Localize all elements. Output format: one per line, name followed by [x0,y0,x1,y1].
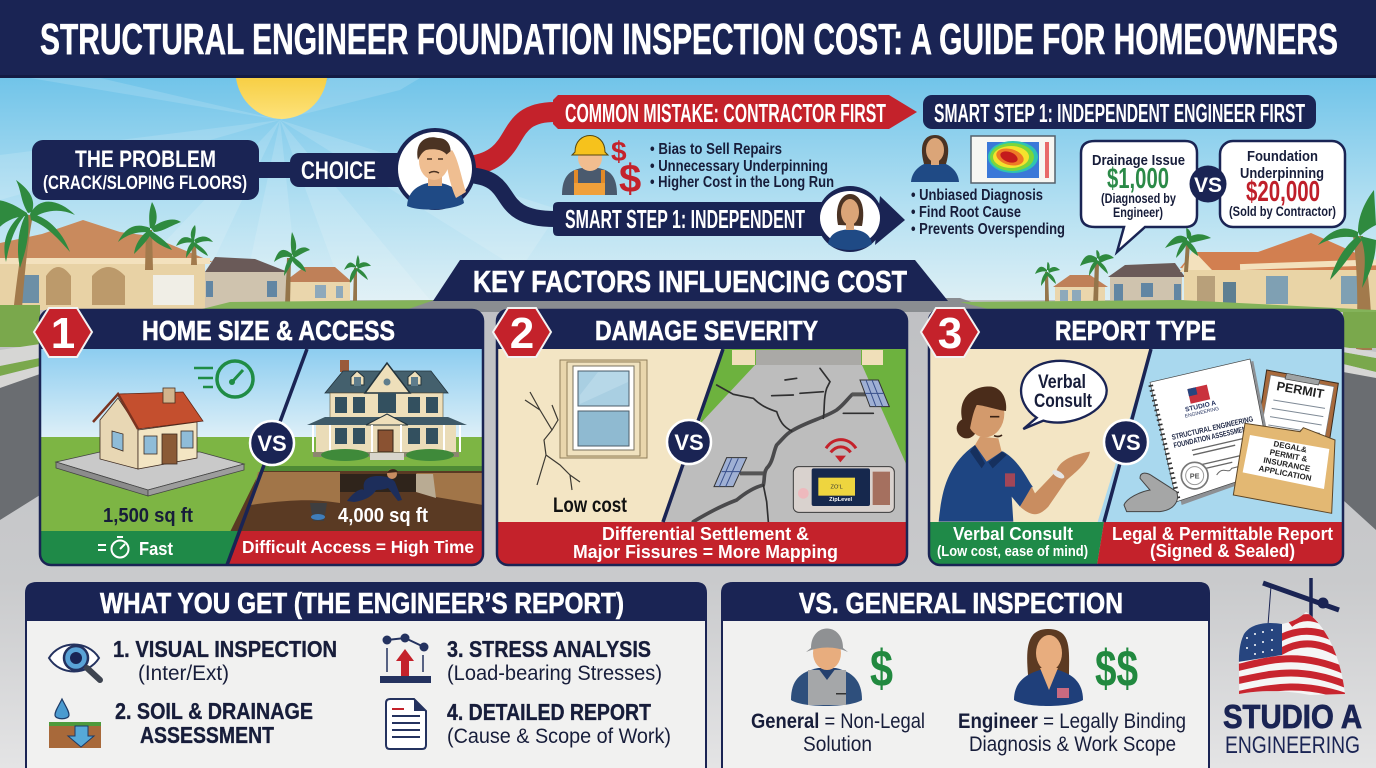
sun [236,78,327,119]
pill: the problem: THE PROBLEM [75,146,216,173]
icon: general inspector: $ [870,640,893,698]
label: verbal consult bubble: Verbal [1038,372,1086,393]
badge: vs [250,421,294,465]
bars: outcome strip [40,531,238,565]
house: third left [284,267,352,303]
panel 1: home size and access [34,308,483,565]
icon: signed report: FOUNDATION ASSESSMENTS [1173,423,1254,450]
icon: engineer: $$ [1095,640,1138,698]
icon: ZipLevel device: ZOʻL [831,483,843,490]
icon: stress analysis [380,634,431,683]
callout: foundation underpinning cost: Underpinning [1240,165,1324,182]
badge: vs: VS [1111,430,1141,455]
soil cutaway [230,466,483,532]
list: independent engineer benefits: • Prevents Overspending [911,221,1065,238]
label: fast with stopwatch [98,537,173,559]
heading: key factors: KEY FACTORS INFLUENCING COST [473,264,907,299]
heading: report type: REPORT TYPE [1055,315,1216,346]
label: general: General = Non-Legal [751,710,925,733]
icon: clipboard permit: PERMIT [1275,379,1325,401]
panel frame and header [40,310,483,565]
callout: foundation underpinning cost: Foundation [1247,148,1318,165]
badge: number 3: 3 [938,309,962,358]
icon: seal press [1124,473,1178,512]
palm trees left [0,180,371,345]
item 2: soil and drainage [115,698,313,748]
item 4: detailed report [447,699,671,748]
house: main right [1180,233,1376,312]
icon: signed report: ENGINEERING [1184,406,1220,420]
badge: vs [1104,420,1148,464]
ribbon: smart step path [468,175,555,219]
house: third right [1053,275,1108,304]
item 4: detailed report: (Cause & Scope of Work) [447,725,671,748]
label: engineer: Diagnosis & Work Scope [969,733,1176,756]
house: second left [205,257,288,308]
banner: common mistake [553,95,917,129]
list: contractor risks [650,141,834,191]
label: general: Solution [803,733,872,756]
label: 1,500 sq ft: 1,500 sq ft [103,505,193,527]
icon: ZipLevel device: ZipLevel [829,497,853,503]
panel 2: damage severity [493,308,907,565]
banner: smart step independent: SMART STEP 1: INDEPENDENT [565,204,805,234]
icon: application folder: PERMIT & [1269,448,1308,464]
icon: report document [386,699,426,749]
icon: signed report [1150,359,1275,505]
panel frame and header [497,310,907,565]
badge: vs [667,420,711,464]
chart: floor level heat map [971,136,1055,183]
heading: damage severity: DAMAGE SEVERITY [595,315,818,346]
icon: engineer with floor heat map [911,135,1055,183]
label: difficult access: Difficult Access = High Time [242,537,474,557]
icon: contractor with dollar signs: $ [611,136,627,167]
label: verbal consult outcome: Verbal Consult [953,524,1073,544]
badge: vs cost: VS [1194,174,1222,197]
badge: number 3 [921,308,979,358]
item 2: soil and drainage: ASSESSMENT [140,722,274,748]
pill: choice [290,153,410,187]
callout: drainage issue cost: $1,000 [1107,163,1169,195]
label: differential settlement [573,524,838,562]
icon: window [560,360,647,458]
icon: fast gauge [194,361,253,397]
banner: common mistake: COMMON MISTAKE: CONTRACTOR FIRST [565,98,886,128]
icon: eye with magnifier [49,644,100,680]
icon: clipboard permit [1257,370,1338,448]
panel frame and header [929,310,1343,565]
icon: signed report: STRUCTURAL ENGINEERING [1171,414,1254,442]
badge: number 2 [493,308,551,358]
wordmark: STUDIO A [1223,698,1362,735]
label: 4,000 sq ft: 4,000 sq ft [338,505,428,527]
panel: what you get [26,583,706,768]
icon: level sensors [714,380,889,487]
icon: speech bubble [1021,361,1107,429]
badge: number 2: 2 [510,309,534,358]
label: verbal consult outcome: (Low cost, ease of mind) [937,544,1088,560]
icon: application folder: INSURANCE [1263,456,1312,474]
panel 3: report type [921,308,1343,565]
label: general [751,710,925,756]
figure: engineer gesturing [939,386,1090,522]
header bar [26,583,706,621]
house: second right [1108,263,1185,309]
badge: number 1: 1 [51,309,75,358]
icon: application folder [1233,423,1335,513]
badge: number 1 [34,308,92,358]
badge: vs: VS [674,430,704,455]
list: contractor risks: • Higher Cost in the Long Run [650,174,834,191]
callout: drainage issue cost: Drainage Issue [1092,152,1185,169]
heading: vs general inspection: VS. GENERAL INSPECTION [799,588,1123,620]
list: contractor risks: • Bias to Sell Repairs [650,141,782,158]
bar: outcome strip [497,522,907,565]
palm trees right [1035,190,1376,350]
icon: application folder: DEGAL& [1273,439,1308,455]
callout: foundation underpinning cost: $20,000 [1246,176,1320,208]
callout: drainage issue cost: Engineer) [1113,204,1163,220]
icon: contractor with dollar signs: $ [619,157,641,201]
label: differential settlement: Major Fissures = More Mapping [573,542,838,562]
ground background [0,300,1376,768]
icon: crane [1263,578,1339,625]
callout: foundation underpinning cost: (Sold by Contractor) [1229,204,1336,219]
label: verbal consult outcome [937,524,1088,560]
pill: the problem [32,140,259,200]
label: fast with stopwatch: Fast [139,539,173,559]
heading: home size and access: HOME SIZE & ACCESS [142,315,395,346]
label: low cost: Low cost [553,494,627,517]
icon: general inspector [791,628,893,706]
avatar: worried homeowner [394,128,476,210]
label: differential settlement: Differential Settlement & [602,524,809,544]
sun rays [0,78,560,310]
label: legal report outcome: Legal & Permittable Report [1112,523,1333,544]
icon: application folder: APPLICATION [1258,464,1312,483]
icon: contractor with dollar signs [562,136,641,201]
item 3: stress analysis: (Load-bearing Stresses) [447,662,662,685]
icon: flag dome [1238,612,1345,695]
label: verbal consult bubble [1034,374,1092,407]
icon: small house on slab [56,388,244,496]
sky background [0,78,1376,313]
icon: soil and drainage [49,699,101,748]
house: main left [0,220,213,310]
callout: drainage issue cost [1081,141,1197,252]
title banner [0,0,1376,78]
list: independent engineer benefits: • Find Root Cause [911,204,1021,221]
icon: engineer [1014,629,1138,706]
item 1: visual inspection: 1. VISUAL INSPECTION [113,636,337,662]
neighbourhood scene left [0,180,371,345]
logo: studio a engineering [1223,578,1362,759]
item 2: soil and drainage: 2. SOIL & DRAINAGE [115,698,313,724]
ribbon: common mistake path [470,112,555,166]
pill: choice: CHOICE [301,157,376,185]
icon: ZipLevel device [793,440,894,512]
bars: outcome strip [929,522,1104,565]
item 1: visual inspection: (Inter/Ext) [138,662,229,685]
label: legal report outcome [1112,523,1333,561]
list: independent engineer benefits: • Unbiased Diagnosis [911,187,1043,204]
callout: foundation underpinning cost [1220,141,1345,227]
badge: vs: VS [257,431,287,456]
heading: what you get: WHAT YOU GET (THE ENGINEER’S REPORT) [100,588,624,620]
label: legal report outcome: (Signed & Sealed) [1150,541,1295,561]
flow: problem to choice [32,140,410,200]
panel: vs general inspection [722,583,1209,768]
item 4: detailed report: 4. DETAILED REPORT [447,699,651,725]
wordmark [1223,698,1362,759]
callout: drainage issue cost: (Diagnosed by [1101,190,1176,206]
label: verbal consult bubble: Consult [1034,391,1093,412]
pill: the problem: (CRACK/SLOPING FLOORS) [43,173,247,194]
list: independent engineer benefits [911,187,1065,238]
avatar: engineer [817,186,905,252]
neighbourhood scene right [1035,190,1376,350]
list: contractor risks: • Unnecessary Underpinning [650,158,828,175]
item 3: stress analysis [447,636,662,685]
icon: signed report: PE [1190,471,1200,480]
street and lawn strips [0,298,1376,530]
driveway with cracks [660,349,907,525]
banner: smart step independent [553,186,905,252]
badge: vs cost [1190,166,1226,202]
icon: large two-storey house [307,360,467,461]
item 1: visual inspection [113,636,337,685]
label: engineer [958,710,1186,756]
item 3: stress analysis: 3. STRESS ANALYSIS [447,636,651,662]
label: engineer: Engineer = Legally Binding [958,710,1186,733]
icon: inspector crawling [347,469,402,502]
icon: signed report: STUDIO A [1184,400,1217,414]
header bar [722,583,1209,621]
icon: minor wall crack [525,392,580,490]
